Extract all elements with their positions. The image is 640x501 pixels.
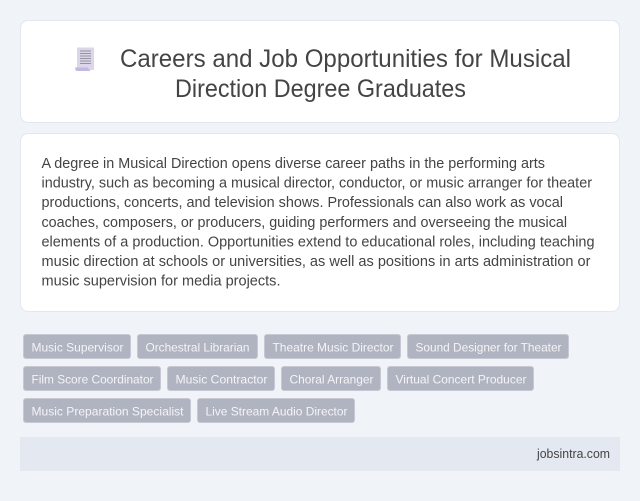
tag: Theatre Music Director: [264, 334, 401, 359]
title: Direction Degree Graduates: [175, 75, 466, 103]
tag: Music Contractor: [167, 366, 275, 391]
tag: Theatre Music Director: Theatre Music Director: [272, 340, 394, 354]
tag: Music Preparation Specialist: Music Preparation Specialist: [32, 404, 184, 418]
description text: productions, concerts, and television shows. Professionals can also work as vocal: [42, 195, 563, 211]
tag: Virtual Concert Producer: [387, 366, 534, 391]
tag: Sound Designer for Theater: Sound Designer for Theater: [416, 340, 562, 354]
tag: Film Score Coordinator: Film Score Coordinator: [32, 372, 154, 386]
description text: elements of a production. Opportunities extend to educational roles, including teaching: [42, 234, 594, 250]
description text: A degree in Musical Direction opens diverse career paths in the performing arts: [42, 156, 545, 172]
tag: Virtual Concert Producer: Virtual Concert Producer: [396, 372, 526, 386]
tag: Choral Arranger: Choral Arranger: [290, 372, 374, 386]
icon: paper scroll document: [75, 48, 94, 71]
tag: Film Score Coordinator: [23, 366, 161, 391]
tag: Orchestral Librarian: [137, 334, 258, 359]
panel: career tags: [23, 334, 569, 423]
panel: description card: [20, 133, 620, 312]
description text: music direction at schools or universities, as well as positions in arts administration or: [42, 254, 591, 270]
description text: industry, such as becoming a musical director, conductor, or music arranger for theater: [42, 176, 592, 192]
tag: Live Stream Audio Director: [197, 398, 355, 423]
footer bar: [20, 437, 620, 471]
footer source text: jobsintra.com: [536, 447, 610, 461]
panel: title card: [20, 20, 620, 123]
tag: Orchestral Librarian: Orchestral Librarian: [146, 340, 250, 354]
tag: Sound Designer for Theater: [407, 334, 569, 359]
tag: Live Stream Audio Director: Live Stream Audio Director: [206, 404, 348, 418]
tag: Music Supervisor: [23, 334, 131, 359]
description text: coaches, composers, or producers, guiding performers and overseeing the musical: [42, 215, 567, 231]
description text: [42, 156, 594, 290]
tag: Music Contractor: Music Contractor: [176, 372, 267, 386]
tag: Music Preparation Specialist: [23, 398, 191, 423]
title: [120, 45, 571, 103]
title: Careers and Job Opportunities for Musical: [120, 45, 571, 73]
description text: music supervision for media projects.: [42, 274, 280, 290]
tag: Choral Arranger: [281, 366, 381, 391]
tag: Music Supervisor: Music Supervisor: [32, 340, 124, 354]
